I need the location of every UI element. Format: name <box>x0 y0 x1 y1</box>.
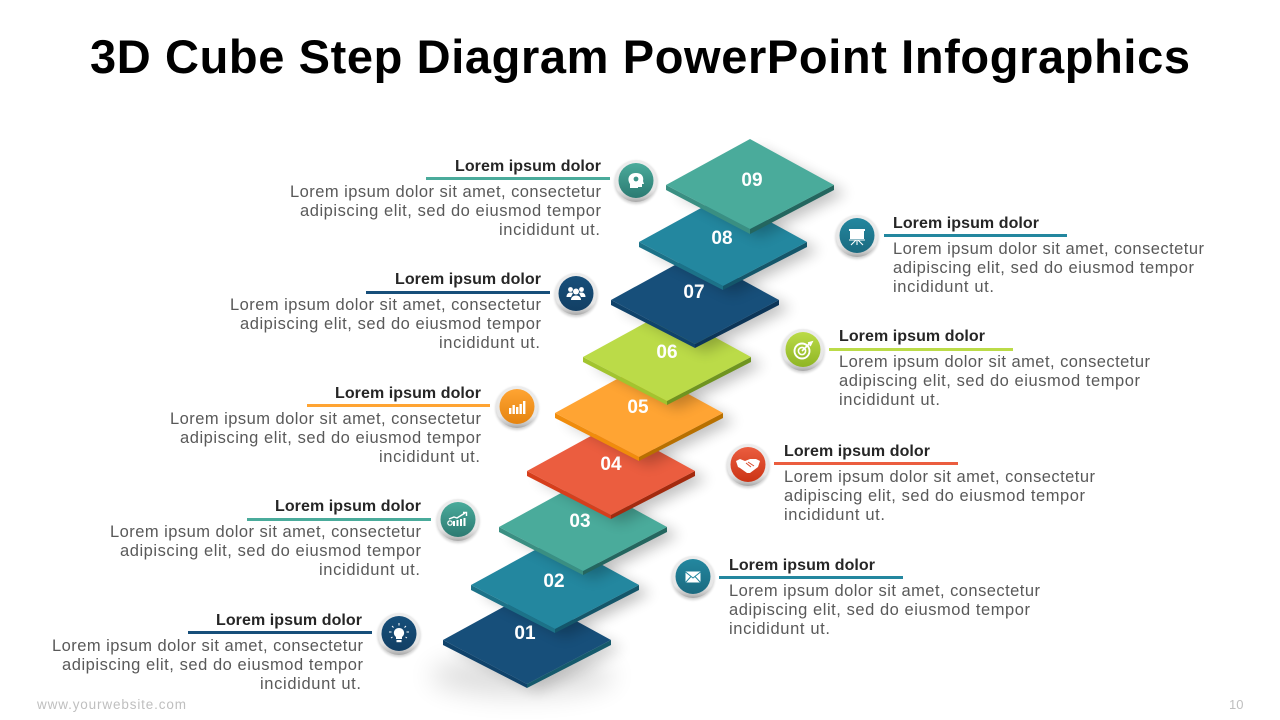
callout 05: incididunt ut. <box>379 448 480 466</box>
callout 05: adipiscing elit, sed do eiusmod tempor <box>180 429 482 447</box>
callout 09 <box>290 158 610 239</box>
callout 07 <box>230 271 550 352</box>
step 05 <box>555 367 735 465</box>
step 09: 09 <box>741 170 763 191</box>
ground shadow <box>430 656 614 696</box>
step 04 <box>527 425 707 523</box>
callout 02: Lorem ipsum dolor <box>729 557 875 574</box>
step 07: 07 <box>683 282 705 303</box>
page number: 10 <box>1229 697 1243 712</box>
step 02: 02 <box>543 571 565 592</box>
icon: envelope <box>672 556 714 600</box>
callout 04: Lorem ipsum dolor <box>784 443 930 460</box>
icon: head with bulb <box>614 160 658 204</box>
step 08 <box>639 196 819 294</box>
callout 06: Lorem ipsum dolor <box>839 328 985 345</box>
callout 09: adipiscing elit, sed do eiusmod tempor <box>300 202 602 220</box>
callout 08: incididunt ut. <box>893 278 994 296</box>
callout 01: adipiscing elit, sed do eiusmod tempor <box>62 656 364 674</box>
callout 03 <box>110 498 431 579</box>
callout 08: adipiscing elit, sed do eiusmod tempor <box>893 259 1194 277</box>
callout 03: adipiscing elit, sed do eiusmod tempor <box>120 542 422 560</box>
callout 07: adipiscing elit, sed do eiusmod tempor <box>240 315 542 333</box>
callout 07: incididunt ut. <box>439 334 540 352</box>
callout 07: Lorem ipsum dolor sit amet, consectetur <box>230 296 542 314</box>
step 07 <box>611 254 791 352</box>
footer website: www.yourwebsite.com <box>36 697 186 712</box>
step 08: 08 <box>711 228 733 249</box>
callout 03: incididunt ut. <box>319 561 420 579</box>
icon: light bulb <box>378 613 420 657</box>
callout 01: incididunt ut. <box>260 675 361 693</box>
callout 01: Lorem ipsum dolor <box>216 612 362 629</box>
callout 02: Lorem ipsum dolor sit amet, consectetur <box>729 582 1040 600</box>
callout 02 <box>719 557 1040 638</box>
step 09 <box>666 139 846 237</box>
callout 07: Lorem ipsum dolor <box>395 271 541 288</box>
callout 08 <box>884 215 1204 296</box>
callout 05: Lorem ipsum dolor sit amet, consectetur <box>170 410 482 428</box>
icon: line chart <box>436 499 480 543</box>
step 06: 06 <box>656 342 678 363</box>
callout 03: Lorem ipsum dolor sit amet, consectetur <box>110 523 422 541</box>
callout 06 <box>829 328 1150 409</box>
callout 02: incididunt ut. <box>729 620 830 638</box>
callout 08: Lorem ipsum dolor <box>893 215 1039 232</box>
callout 09: Lorem ipsum dolor <box>455 158 601 175</box>
callout 06: incididunt ut. <box>839 391 940 409</box>
callout 06: Lorem ipsum dolor sit amet, consectetur <box>839 353 1150 371</box>
step 01: 01 <box>514 623 536 644</box>
step 05: 05 <box>627 397 649 418</box>
callout 04 <box>774 443 1096 524</box>
step 01 <box>443 594 623 692</box>
step 06 <box>583 311 763 409</box>
title: 3D Cube Step Diagram PowerPoint Infographics <box>90 30 1190 83</box>
icon: handshake <box>726 444 770 488</box>
callout 06: adipiscing elit, sed do eiusmod tempor <box>839 372 1140 390</box>
callout 09: Lorem ipsum dolor sit amet, consectetur <box>290 183 602 201</box>
callout 03: Lorem ipsum dolor <box>275 498 421 515</box>
callout 05: Lorem ipsum dolor <box>335 385 481 402</box>
callout 02: adipiscing elit, sed do eiusmod tempor <box>729 601 1030 619</box>
callout 04: adipiscing elit, sed do eiusmod tempor <box>784 487 1086 505</box>
step 02 <box>471 539 651 637</box>
callout 05 <box>170 385 490 466</box>
callout 04: Lorem ipsum dolor sit amet, consectetur <box>784 468 1096 486</box>
icon: presentation board <box>836 215 878 259</box>
icon: target <box>782 329 824 373</box>
callout 09: incididunt ut. <box>499 221 600 239</box>
icon: people <box>554 273 598 317</box>
step 03 <box>499 481 679 579</box>
callout 04: incididunt ut. <box>784 506 885 524</box>
step 04: 04 <box>600 454 622 475</box>
callout 01: Lorem ipsum dolor sit amet, consectetur <box>52 637 364 655</box>
callout 01 <box>52 612 372 693</box>
icon: bar chart <box>496 386 538 430</box>
callout 08: Lorem ipsum dolor sit amet, consectetur <box>893 240 1204 258</box>
step 03: 03 <box>569 511 591 532</box>
